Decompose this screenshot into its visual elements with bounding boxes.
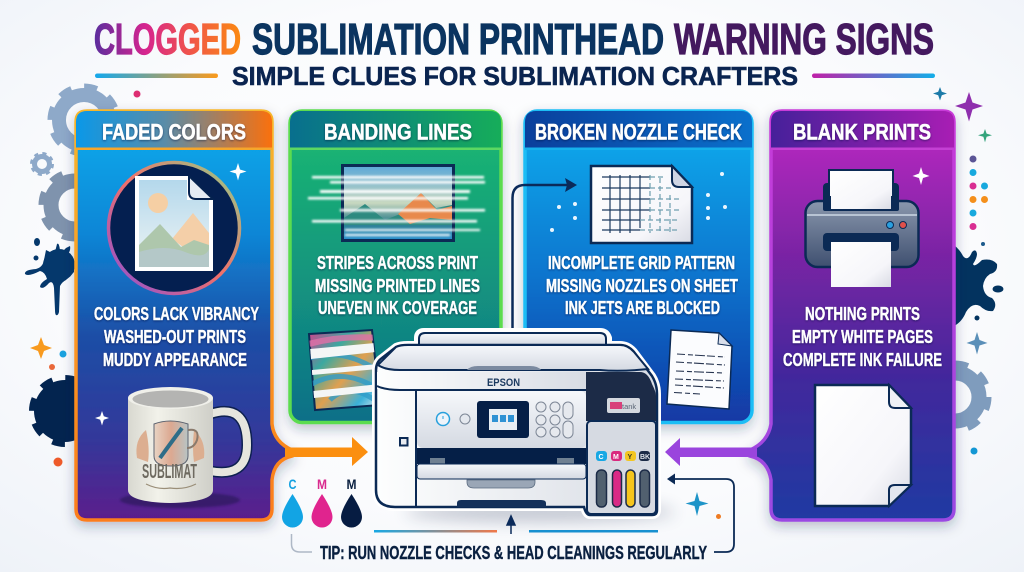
decoration: bottom star and dot [686, 492, 721, 519]
decoration: left gears and ink [25, 87, 140, 466]
icon: banded print [308, 166, 485, 240]
scattered dots [550, 172, 727, 232]
output slot [417, 448, 586, 464]
label K: M [346, 476, 356, 492]
body text [546, 253, 738, 318]
home button [460, 414, 470, 424]
top cover [378, 345, 648, 371]
panel: blank prints [750, 111, 954, 520]
drop black [341, 494, 362, 528]
power button [436, 412, 450, 426]
body text: UNEVEN INK COVERAGE [318, 298, 477, 318]
logo band [377, 372, 586, 389]
arrow: tip bracket to printer [667, 474, 734, 552]
body text: MISSING PRINTED LINES [315, 276, 480, 296]
tip rule [374, 530, 658, 532]
icon: blank sheet [815, 385, 911, 506]
body text: INCOMPLETE GRID PATTERN [548, 253, 735, 273]
header text: BLANK PRINTS [793, 120, 931, 144]
ink tanks [596, 470, 650, 507]
arrow: purple to printer [665, 438, 757, 466]
brand: EPSON [487, 377, 520, 389]
ink labels: Y [628, 454, 632, 461]
icon: printer with blank pages [806, 170, 918, 287]
keypad [536, 402, 573, 438]
header [290, 111, 501, 150]
sparkle [230, 163, 246, 180]
body text: INK JETS ARE BLOCKED [565, 298, 720, 318]
ink labels: C [598, 454, 604, 461]
body text: MUDDY APPEARANCE [103, 350, 247, 370]
arrow: tip up to printer [507, 516, 515, 534]
icon: faded image in circle [108, 162, 240, 294]
screen [477, 401, 529, 438]
body text: MISSING NOZZLES ON SHEET [546, 276, 738, 296]
printer shadow [405, 502, 675, 522]
ink drops [282, 476, 362, 528]
header [76, 111, 273, 150]
arrow: orange to printer [285, 437, 368, 466]
body text [783, 304, 942, 370]
icon: text document [667, 330, 732, 409]
panel body [76, 111, 292, 520]
paper lid [419, 333, 606, 345]
body text: NOTHING PRINTS [805, 304, 920, 324]
icon: nozzle check sheet [591, 166, 692, 243]
header [525, 111, 752, 150]
arrow: navy to nozzle sheet [512, 178, 577, 340]
icon: sublimation mug [120, 387, 247, 508]
ink labels: BK [640, 454, 650, 461]
sparkle [95, 411, 109, 426]
ink tank section: tank [622, 402, 636, 411]
ink labels [596, 451, 650, 461]
title: CLOGGED [94, 15, 241, 64]
body text: COMPLETE INK FAILURE [783, 350, 942, 370]
label M: M [317, 476, 327, 492]
status square [400, 438, 408, 446]
header text: FADED COLORS [102, 120, 246, 144]
title: SUBLIMATION PRINTHEAD [252, 15, 664, 64]
panel body [290, 111, 501, 422]
tray handle [467, 480, 535, 488]
panel body [750, 111, 954, 520]
icon: sublimation mug: SUBLIMAT [142, 461, 197, 483]
body text [94, 304, 259, 370]
output tray [417, 464, 586, 479]
control panel [417, 391, 586, 448]
header text: BROKEN NOZZLE CHECK [535, 120, 742, 144]
body text: EMPTY WHITE PAGES [792, 327, 933, 347]
drop magenta [312, 494, 332, 528]
main body [376, 345, 657, 515]
header text: BANDING LINES [324, 120, 472, 144]
panel: faded colors [76, 111, 292, 520]
body text: WASHED-OUT PRINTS [104, 327, 246, 347]
panel: banding lines [290, 111, 501, 422]
base slot [457, 500, 546, 507]
left column [415, 390, 417, 507]
white outline [376, 332, 657, 515]
decoration: right stars, dots, ink and gear [922, 87, 1004, 454]
title [94, 15, 934, 64]
body text: COLORS LACK VIBRANCY [94, 304, 259, 324]
label C: C [288, 476, 296, 492]
body text: STRIPES ACROSS PRINT [317, 253, 478, 273]
paper guides [430, 458, 574, 464]
ink tank section [586, 372, 656, 514]
subtitle: SIMPLE CLUES FOR SUBLIMATION CRAFTERS [232, 61, 798, 91]
tip text: TIP: RUN NOZZLE CHECKS & HEAD CLEANINGS REGULARLY [320, 543, 707, 563]
cover handle [467, 366, 541, 370]
tip bracket left [292, 534, 312, 552]
panel: broken nozzle check [525, 111, 752, 422]
sparkle [912, 167, 930, 185]
ink labels: M [613, 454, 619, 461]
printer [376, 332, 657, 515]
panel body [525, 111, 752, 422]
body text [315, 253, 480, 318]
header [771, 111, 954, 150]
drop cyan [282, 494, 303, 528]
icon: banded photo [305, 330, 382, 410]
